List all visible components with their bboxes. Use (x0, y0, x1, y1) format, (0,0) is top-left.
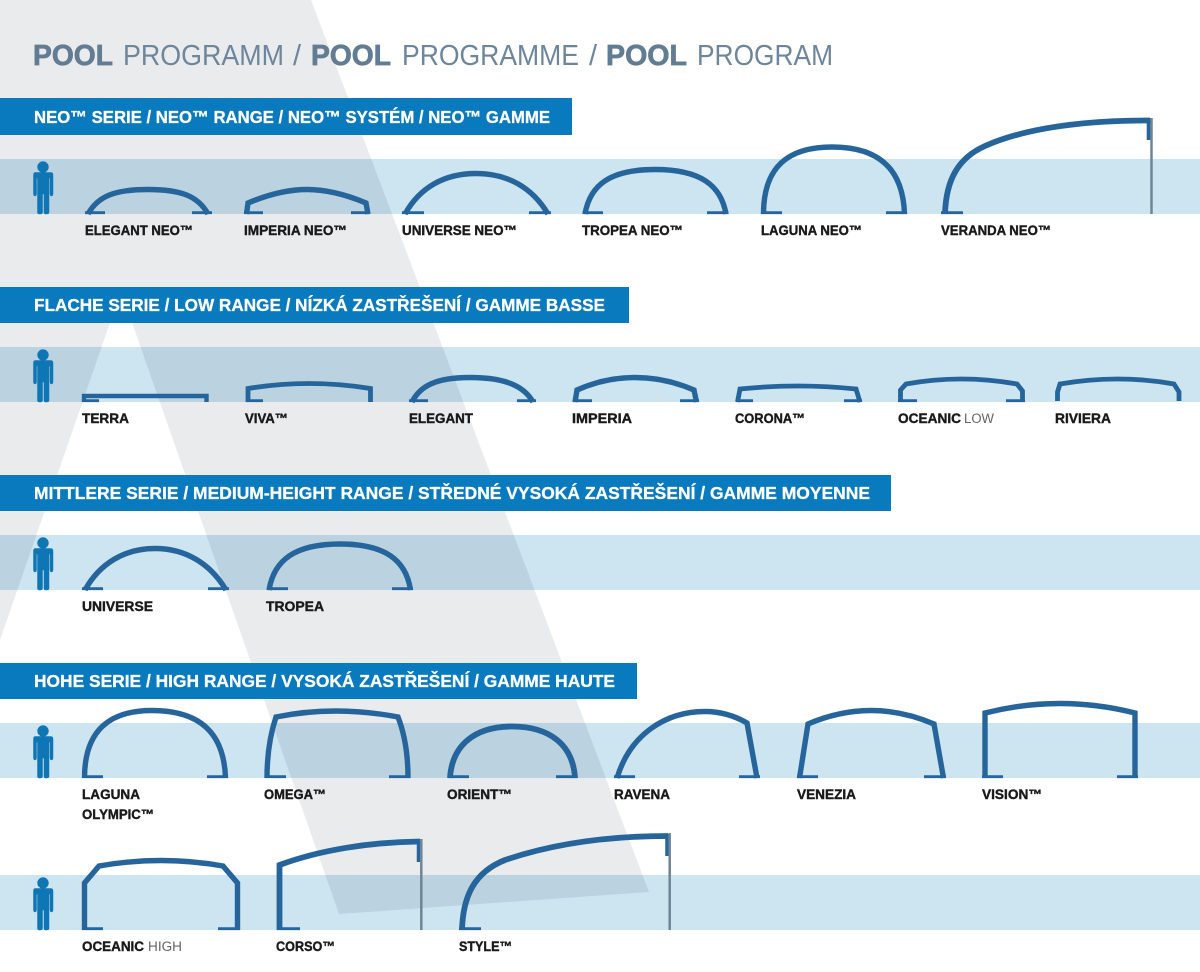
title: / (589, 40, 598, 72)
enclosure: Tropea Neo: TROPEA NEO™ (582, 223, 683, 238)
enclosure: Oceanic High: HIGH (148, 939, 182, 954)
enclosure: Vision (982, 704, 1138, 802)
enclosure: Universe: UNIVERSE (82, 599, 153, 614)
panel: Medium-height range (0, 475, 1200, 614)
enclosure: Style: STYLE™ (459, 939, 512, 954)
height band: Medium-height range (0, 535, 1200, 590)
icon: person (34, 162, 53, 214)
enclosure: Imperia: IMPERIA (572, 411, 632, 426)
enclosure: Imperia (572, 378, 699, 426)
enclosure: Elegant Neo (85, 190, 212, 238)
heading: Neo range (0, 98, 572, 135)
enclosure: Venezia: VENEZIA (797, 787, 856, 802)
enclosure: Universe (82, 548, 229, 614)
panel: High range (0, 663, 1200, 954)
enclosure: Oceanic High: OCEANIC (82, 939, 144, 954)
height band: Neo range (0, 159, 1200, 214)
enclosure: Corso (276, 839, 421, 954)
enclosure: Orient (447, 726, 578, 802)
heading: Low range (0, 287, 629, 323)
enclosure: Vision: VISION™ (982, 787, 1042, 802)
title: POOL (311, 40, 391, 72)
enclosure: Laguna Olympic: OLYMPIC™ (82, 807, 154, 822)
enclosure: Ravena (614, 712, 760, 802)
enclosure: Viva (245, 384, 370, 426)
enclosure: Universe Neo: UNIVERSE NEO™ (402, 223, 517, 238)
enclosure: Style (459, 833, 670, 954)
height band: Low range (0, 347, 1200, 402)
height band: High range row 1 (0, 723, 1200, 778)
panel: Neo range (0, 98, 1200, 238)
title: PROGRAMME (402, 40, 579, 72)
panel: Low range (0, 287, 1200, 426)
height band: High range row 2 (0, 875, 1200, 930)
enclosure: Veranda Neo: VERANDA NEO™ (941, 223, 1051, 238)
icon: person (34, 878, 53, 930)
enclosure: Universe Neo (402, 174, 551, 238)
icon: person (34, 726, 53, 778)
enclosure: Tropea Neo (582, 170, 728, 238)
heading: Medium-height range: MITTLERE SERIE / MEDIUM-HEIGHT RANGE / STŘEDNÉ VYSOKÁ ZASTŘEŠENÍ / GAMME MOYENNE (34, 482, 870, 503)
enclosure: Ravena: RAVENA (614, 787, 670, 802)
heading: Low range: FLACHE SERIE / LOW RANGE / NÍZKÁ ZASTŘEŠENÍ / GAMME BASSE (34, 294, 605, 315)
enclosure: Oceanic High (82, 860, 240, 954)
heading: Neo range: NEO™ SERIE / NEO™ RANGE / NEO™ SYSTÉM / NEO™ GAMME (34, 106, 550, 127)
enclosure: Corso: CORSO™ (276, 939, 335, 954)
icon: person (34, 350, 53, 402)
enclosure: Orient: ORIENT™ (447, 787, 512, 802)
background letter A shape (0, 0, 649, 914)
enclosure: Viva: VIVA™ (245, 411, 288, 426)
enclosure: Tropea (266, 544, 413, 614)
enclosure: Riviera (1055, 379, 1179, 426)
title: / (293, 40, 302, 72)
enclosure: Venezia (797, 710, 946, 802)
enclosure: Corona (735, 386, 862, 426)
enclosure: Laguna Olympic (82, 710, 228, 822)
enclosure: Oceanic Low (898, 379, 1025, 426)
enclosure: Riviera: RIVIERA (1055, 411, 1111, 426)
enclosure: Corona: CORONA™ (735, 411, 805, 426)
enclosure: Omega: OMEGA™ (264, 787, 326, 802)
icon: person (34, 538, 53, 590)
enclosure: Laguna Neo (761, 147, 907, 238)
enclosure: Imperia Neo (244, 190, 370, 238)
enclosure: Elegant: ELEGANT (409, 411, 474, 426)
enclosure: Elegant Neo: ELEGANT NEO™ (85, 223, 193, 238)
title: PROGRAMM (123, 40, 284, 72)
enclosure: Oceanic Low: OCEANIC (898, 411, 961, 426)
title: POOL (33, 40, 113, 72)
enclosure: Terra (82, 396, 206, 426)
heading: High range: HOHE SERIE / HIGH RANGE / VYSOKÁ ZASTŘEŠENÍ / GAMME HAUTE (34, 670, 615, 691)
enclosure: Imperia Neo: IMPERIA NEO™ (244, 223, 347, 238)
enclosure: Laguna Neo: LAGUNA NEO™ (761, 223, 862, 238)
enclosure: Veranda Neo (941, 118, 1152, 238)
heading: High range (0, 663, 637, 699)
title: PROGRAM (697, 40, 833, 72)
title: POOL (606, 40, 687, 72)
enclosure: Tropea: TROPEA (266, 599, 324, 614)
enclosure: Terra: TERRA (82, 411, 129, 426)
title (33, 40, 833, 72)
enclosure: Oceanic Low: LOW (964, 411, 994, 426)
heading: Medium-height range (0, 475, 891, 511)
enclosure: Laguna Olympic: LAGUNA (82, 787, 140, 802)
enclosure: Omega (264, 711, 410, 802)
enclosure: Elegant (409, 378, 536, 426)
